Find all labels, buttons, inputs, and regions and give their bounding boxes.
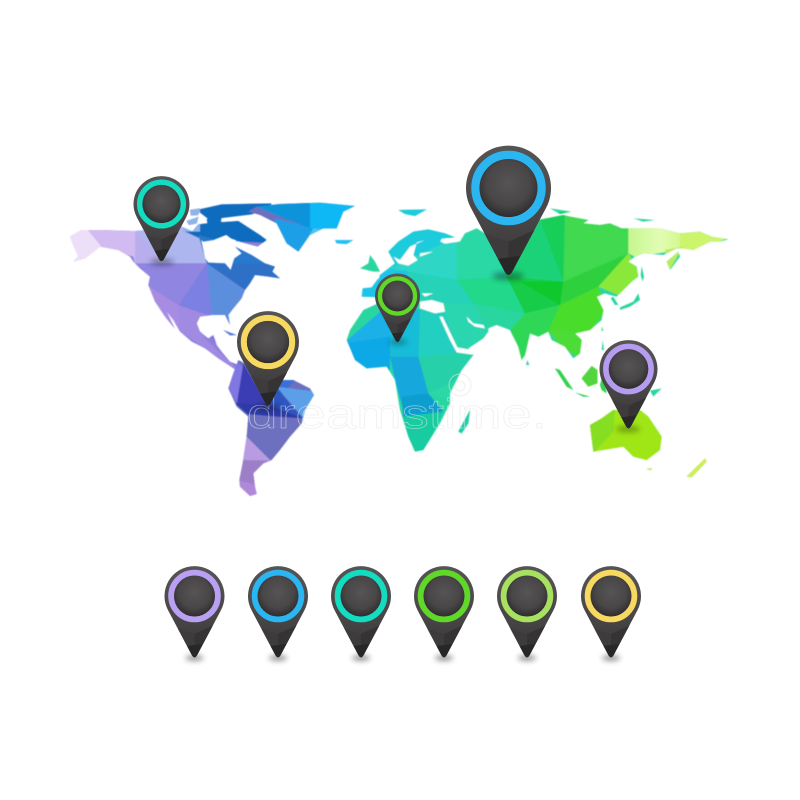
pin: purple, Australia — [599, 340, 658, 432]
watermark text — [247, 374, 547, 437]
pin: teal, North America — [134, 176, 189, 265]
pin: green, Africa — [375, 274, 420, 344]
pin row — [164, 566, 641, 660]
pin: purple — [164, 566, 224, 660]
world map — [65, 200, 740, 500]
pin: lime — [497, 566, 557, 660]
pin: green — [414, 566, 474, 660]
map: Eurasia, Africa and Australia — [340, 200, 740, 483]
map: South America and Greenland — [227, 200, 360, 500]
pin: yellow, South America — [237, 311, 299, 410]
map: North America — [70, 202, 280, 370]
pin: yellow — [581, 566, 641, 660]
pin: blue, Asia — [466, 146, 551, 280]
pin: teal — [331, 566, 391, 660]
seas carved out of the landmass — [392, 240, 486, 356]
pin: blue — [248, 566, 308, 660]
watermark text: dreamstime. — [247, 390, 547, 437]
